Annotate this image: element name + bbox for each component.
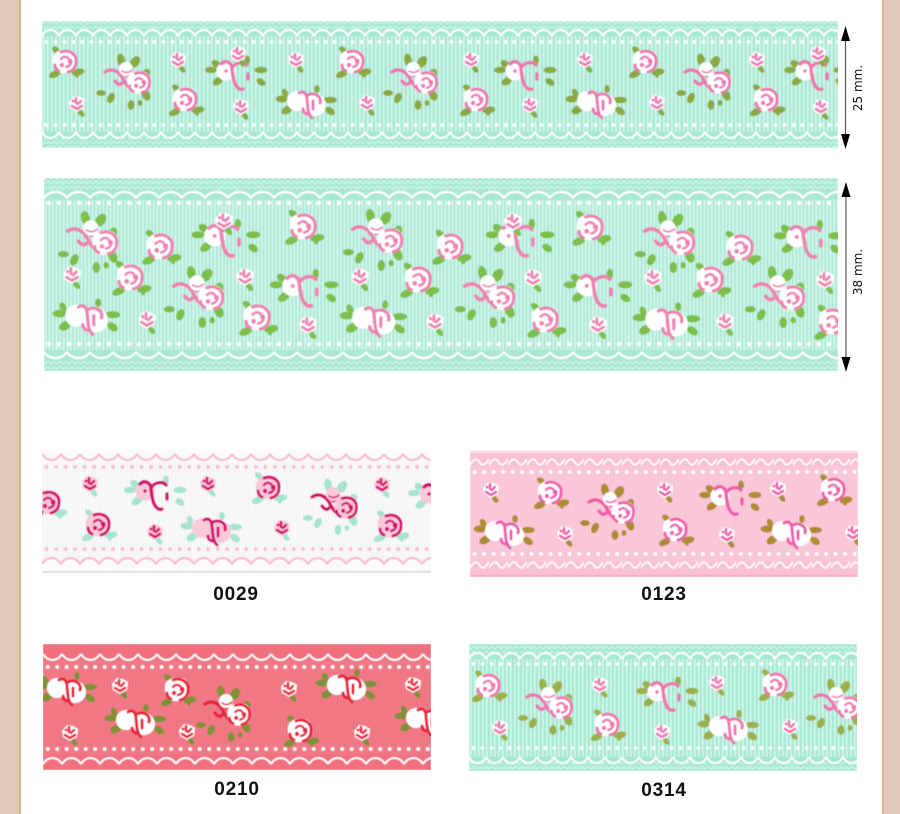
dimension arrow: 25 mm: 25 mm. — [851, 65, 865, 111]
dimension arrow: 38 mm: 38 mm. — [851, 249, 865, 295]
label: 0210: 0210 — [214, 779, 260, 800]
label: 0029: 0029 — [213, 584, 259, 605]
label: 0314: 0314 — [641, 780, 687, 801]
ribbon: 38 mm mint — [44, 178, 838, 371]
dimension arrow: 38 mm — [842, 182, 865, 372]
ribbon: 0210 coral — [43, 644, 431, 770]
label: 0123: 0123 — [641, 584, 687, 605]
ribbon: 0123 pink — [470, 450, 858, 577]
ribbon: 0029 white — [42, 453, 431, 573]
ribbon: 25 mm mint — [42, 21, 838, 148]
dimension arrow: 25 mm — [841, 26, 865, 149]
ribbon: 0314 mint — [469, 644, 857, 771]
